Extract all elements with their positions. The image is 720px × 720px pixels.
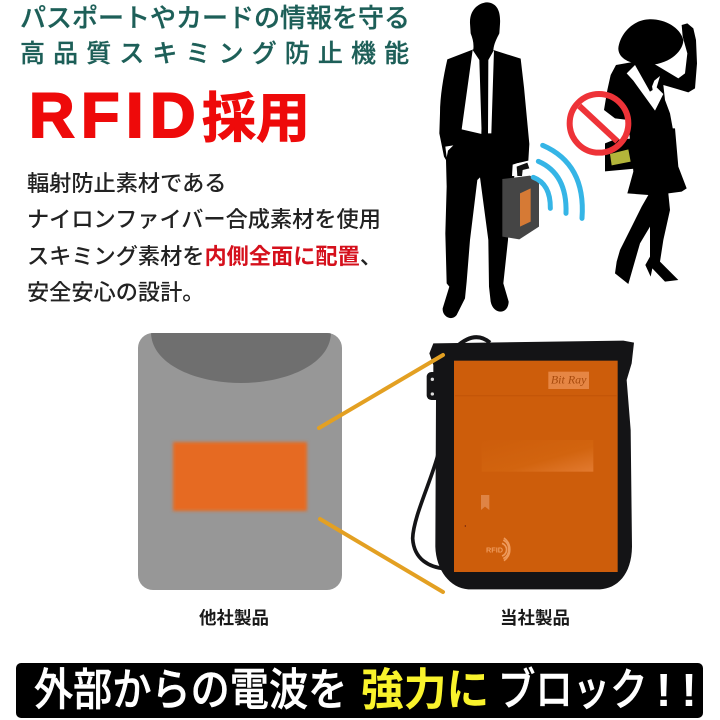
icon: shoulder bag (605, 138, 635, 171)
panel: own product pouch: Bit Ray (551, 372, 587, 386)
icon: briefcase (502, 161, 539, 239)
description text: 輻射防止素材である (27, 171, 226, 196)
label: own product: 当社製品 (500, 608, 570, 628)
panel: other company product (138, 333, 342, 590)
heading line 2: 高品質スキミング防止機能 (20, 40, 417, 68)
banner text: ブロック (498, 666, 648, 715)
banner (16, 663, 703, 718)
description text: スキミング素材を内側全面に配置、 (27, 244, 382, 269)
panel: own product pouch: RFID (486, 546, 503, 555)
RFID title: RFID採用 (29, 81, 310, 151)
heading line 1: パスポートやカードの情報を守る (20, 3, 410, 33)
description text: 安全安心の設計。 (27, 280, 204, 305)
label: other company product: 他社製品 (199, 608, 269, 628)
man silhouette (439, 2, 529, 318)
banner text: 強力に (361, 666, 489, 715)
woman silhouette (604, 19, 697, 284)
icon: prohibition sign (570, 94, 628, 153)
description text (27, 171, 382, 305)
banner text (34, 664, 703, 716)
description text: ナイロンファイバー合成素材を使用 (27, 207, 381, 232)
icon: wireless waves (533, 145, 582, 218)
banner text: 外部からの電波を (34, 666, 347, 715)
